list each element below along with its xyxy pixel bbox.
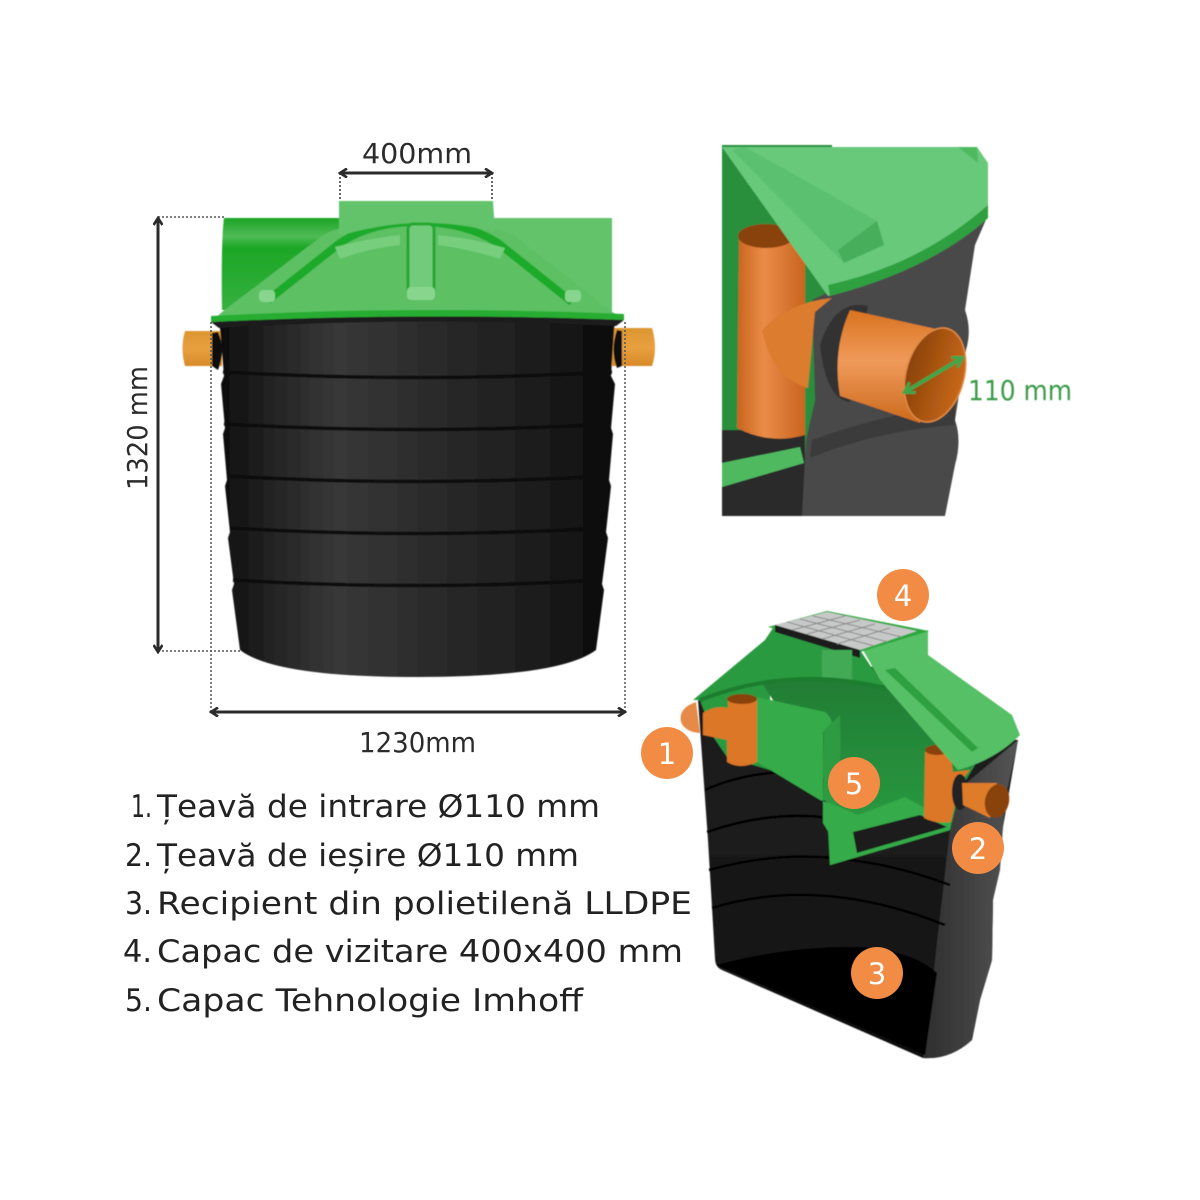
green lid cone [211,222,623,322]
badge 1 [641,727,693,779]
lid right light [863,630,1020,770]
green lid rear left block [222,218,340,310]
tank ribs [223,372,612,586]
right recess [614,330,622,368]
outlet pipe [962,783,997,818]
item 5: Capac Tehnologie Imhoff [157,983,584,1019]
outlet pipe opening [895,321,975,429]
item 4: Capac de vizitare 400x400 mm [157,934,683,970]
outlet pipe [838,310,945,423]
floor curve [716,947,937,1055]
badge 2: 2 [969,832,987,866]
lower green baffle [722,447,804,487]
lid ridge [268,222,572,302]
badge 4 [877,569,929,621]
T pipe branch [762,298,832,388]
dimension: 1230mm: 1230mm [359,726,476,759]
baffle [757,697,950,865]
neck under hatch [822,650,852,680]
badge 3: 3 [868,957,886,991]
outlet opening [982,782,1012,820]
hatch grid [775,612,917,650]
arc ribs [335,235,400,259]
lid rim [211,310,624,322]
cutaway tank [681,611,1020,1058]
green lid rear right block [494,218,612,314]
rear arc [700,679,885,700]
right orange pipe [612,328,655,366]
arrow 110 mm [905,358,962,392]
badge 3 [851,947,903,999]
item 1: Țeavă de intrare Ø110 mm [156,789,600,825]
rubber seal [820,305,868,402]
outlet T opening [925,745,949,755]
item 2: Țeavă de ieșire Ø110 mm [156,838,579,874]
hatch collar [339,201,495,236]
dark green backdrop [722,145,832,516]
dimension: 400mm: 400mm [362,137,472,170]
raised corner [958,147,978,163]
T pipe vertical [737,238,805,439]
item 3: Recipient din polietilenă LLDPE [157,886,692,922]
green lid [722,147,988,296]
lid rim [828,205,988,296]
interior ribs [705,772,950,925]
dimension: 1320 mm [121,217,240,651]
label 110 mm: 110 mm [968,374,1072,407]
dimension: 1320 mm: 1320 mm [121,366,154,490]
lid right raised rib [885,668,978,752]
item 4: 4. [123,934,152,970]
dark slot [853,815,947,853]
T pipe opening [738,224,794,248]
item 5: 5. [125,983,152,1019]
tank body black [698,700,1018,1058]
badge 4: 4 [894,579,912,613]
badge 2 [952,822,1004,874]
inlet T pipe [703,700,757,766]
green patch behind inlet [700,680,770,770]
centre rib [408,224,434,294]
inlet pipe opening [727,694,757,704]
tank body [219,316,615,677]
dimension: 1230mm [211,322,625,759]
grey tank wall [802,215,988,516]
legend list [123,789,692,1019]
lid bumps [259,290,275,302]
main tank illustration [182,201,655,677]
badge 1: 1 [658,737,676,771]
dimension: 400mm [340,137,492,200]
left recess [212,332,222,370]
outer wall [923,740,1018,1058]
badge 5 [828,757,880,809]
lid underside [693,625,885,700]
item 2: 2. [125,838,152,874]
baffle lip [823,715,840,805]
raised lid rib [732,147,884,263]
cavity back green [760,665,975,865]
outlet T pipe [924,752,970,822]
hatch block [768,611,929,652]
badge 5: 5 [845,767,863,801]
inlet pipe stub [681,702,700,733]
item 3: 3. [125,886,152,922]
rib end face [838,221,884,263]
item 1: 1. [131,789,152,825]
seal [952,774,968,810]
left orange pipe [182,331,222,366]
detail panel: outlet pipe [722,145,1072,516]
black lower interior [722,430,805,516]
